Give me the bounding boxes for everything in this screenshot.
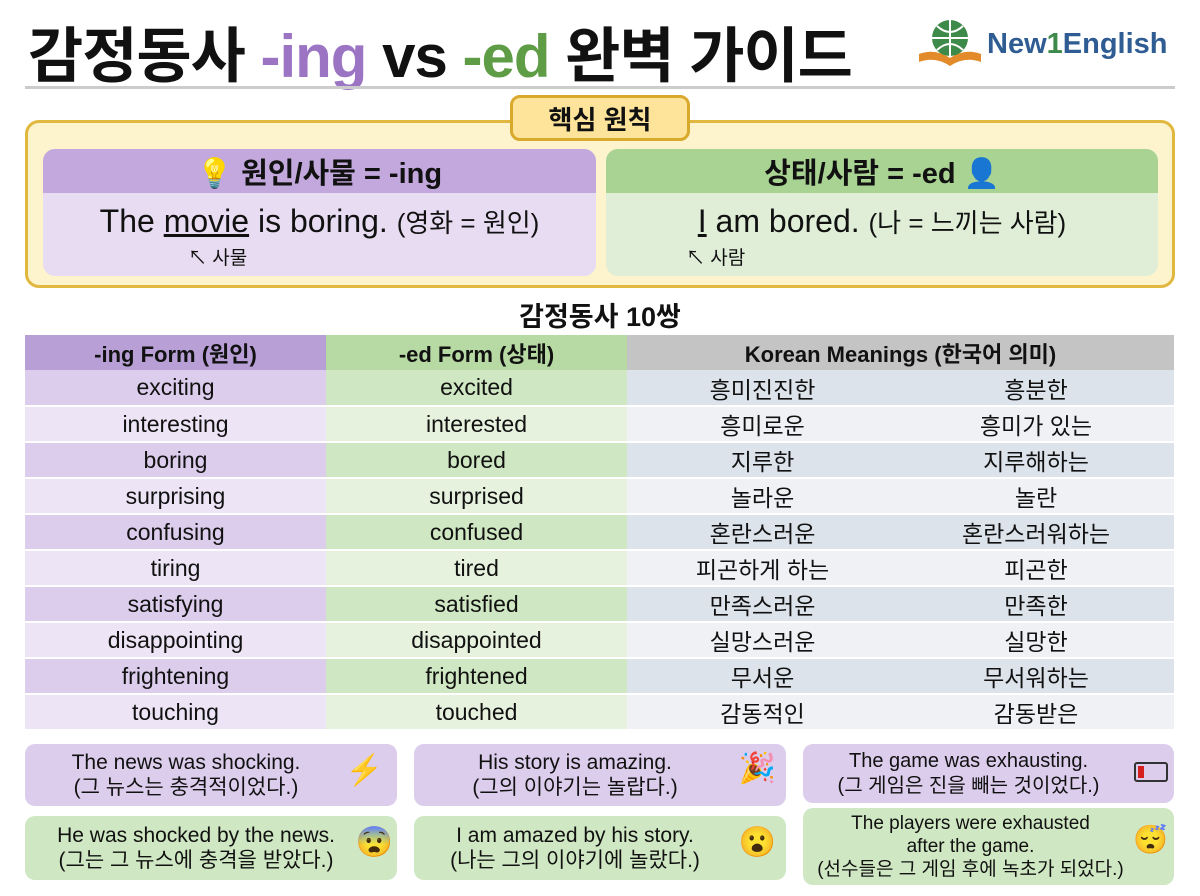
- table: emotion verbs: 피곤하게 하는: [696, 557, 829, 583]
- table: emotion verbs: 지루해하는: [983, 449, 1089, 475]
- table: emotion verbs: disappointing: [108, 626, 243, 652]
- table: emotion verbs: frightened: [425, 662, 528, 688]
- table: emotion verbs: satisfying: [128, 590, 223, 616]
- table: emotion verbs: 흥분한: [1004, 376, 1068, 402]
- logo: New1English: [987, 28, 1168, 60]
- card: shocking: The news was shocking.: [72, 751, 300, 774]
- table: emotion verbs: 흥미진진한: [710, 376, 815, 402]
- table: emotion verbs: excited: [440, 374, 513, 400]
- annotation: ↖ 사람: [686, 248, 745, 269]
- card: exhausted: 😴: [1133, 824, 1168, 855]
- table: emotion verbs: interested: [426, 410, 527, 436]
- card: exhausting: (그 게임은 진을 빼는 것이었다.): [838, 774, 1099, 796]
- table: emotion verbs: 놀란: [1015, 485, 1057, 511]
- card: amazing: His story is amazing.: [478, 751, 672, 774]
- table: emotion verbs: interesting: [122, 410, 229, 436]
- heading: ed rule: 상태/사람 = -ed 👤: [764, 158, 1000, 190]
- example sentence ing: The movie is boring. (영화 = 원인): [100, 203, 539, 239]
- table: emotion verbs: 감동적인: [720, 701, 805, 727]
- table: emotion verbs: bored: [447, 446, 506, 472]
- panel: ing rule: [43, 149, 596, 276]
- table: emotion verbs: 지루한: [731, 449, 794, 475]
- table: emotion verbs: 실망스러운: [710, 629, 815, 655]
- panel: ed rule: [606, 149, 1158, 276]
- heading: table: 감정동사 10쌍: [519, 302, 681, 332]
- card: exhausted: after the game.: [907, 836, 1034, 857]
- card: shocking: [25, 744, 397, 806]
- table: emotion verbs: 흥미로운: [720, 413, 805, 439]
- annotation: ↖ 사물: [188, 248, 247, 269]
- card: amazed: (나는 그의 이야기에 놀랐다.): [450, 849, 700, 872]
- table: emotion verbs: confusing: [126, 518, 225, 544]
- card: shocked: [25, 816, 397, 880]
- card: amazing: [414, 744, 786, 806]
- table: emotion verbs: -ing Form (원인): [94, 342, 257, 366]
- table: emotion verbs: 혼란스러운: [710, 521, 815, 547]
- card: shocked: (그는 그 뉴스에 충격을 받았다.): [58, 849, 334, 872]
- table: emotion verbs: 놀라운: [731, 485, 794, 511]
- table: emotion verbs: 감동받은: [994, 701, 1078, 727]
- card: shocked: 😨: [356, 826, 393, 859]
- table: emotion verbs: -ed Form (상태): [399, 342, 554, 366]
- heading: ing rule: 💡 원인/사물 = -ing: [197, 158, 442, 190]
- card: amazing: (그의 이야기는 놀랍다.): [472, 776, 678, 799]
- table: emotion verbs: 무서운: [731, 665, 794, 691]
- card: shocking: ⚡: [346, 754, 383, 787]
- example sentence ed: I am bored. (나 = 느끼는 사람): [698, 203, 1066, 239]
- table: emotion verbs: satisfied: [434, 590, 519, 616]
- heading: ed rule: [606, 149, 1158, 193]
- table: emotion verbs: exciting: [136, 374, 214, 400]
- table: emotion verbs: confused: [430, 518, 523, 544]
- card: exhausted: [803, 808, 1174, 885]
- table: emotion verbs: surprising: [126, 482, 225, 508]
- table: emotion verbs: 피곤한: [1004, 557, 1068, 583]
- table: emotion verbs: surprised: [429, 482, 524, 508]
- table: emotion verbs: tiring: [151, 554, 200, 580]
- table: emotion verbs: 만족스러운: [710, 593, 815, 619]
- card: amazing: 🎉: [739, 752, 776, 785]
- card: amazed: I am amazed by his story.: [456, 824, 694, 847]
- table: emotion verbs: 혼란스러워하는: [962, 521, 1110, 547]
- heading: ing rule: [43, 149, 596, 193]
- table: emotion verbs: 실망한: [1004, 629, 1068, 655]
- table: emotion verbs: 만족한: [1004, 593, 1068, 619]
- card: exhausting: The game was exhausting.: [849, 750, 1088, 772]
- title: 감정동사 -ing vs -ed 완벽 가이드: [28, 23, 852, 90]
- card: shocked: He was shocked by the news.: [57, 824, 335, 847]
- heading: core principle: 핵심 원칙: [549, 104, 651, 134]
- table: emotion verbs: Korean Meanings (한국어 의미): [745, 342, 1056, 366]
- table: emotion verbs: touched: [436, 698, 517, 724]
- logo: [919, 20, 1168, 66]
- table: emotion verbs: tired: [454, 554, 499, 580]
- card: shocking: (그 뉴스는 충격적이었다.): [74, 776, 298, 799]
- panel: core principle: [25, 120, 1175, 288]
- card: exhausted: (선수들은 그 게임 후에 녹초가 되었다.): [817, 859, 1124, 880]
- card: exhausting: [803, 744, 1174, 803]
- table: emotion verbs: frightening: [122, 662, 229, 688]
- card: exhausted: The players were exhausted: [851, 813, 1090, 834]
- table: emotion verbs: 무서워하는: [983, 665, 1089, 691]
- table: emotion verbs: [25, 335, 1174, 729]
- card: amazed: [414, 816, 786, 880]
- heading: core principle: [510, 95, 690, 141]
- card: amazed: 😮: [739, 826, 776, 859]
- table: emotion verbs: touching: [132, 698, 219, 724]
- table: emotion verbs: disappointed: [411, 626, 542, 652]
- table: emotion verbs: boring: [144, 446, 207, 472]
- table: emotion verbs: 흥미가 있는: [980, 413, 1092, 439]
